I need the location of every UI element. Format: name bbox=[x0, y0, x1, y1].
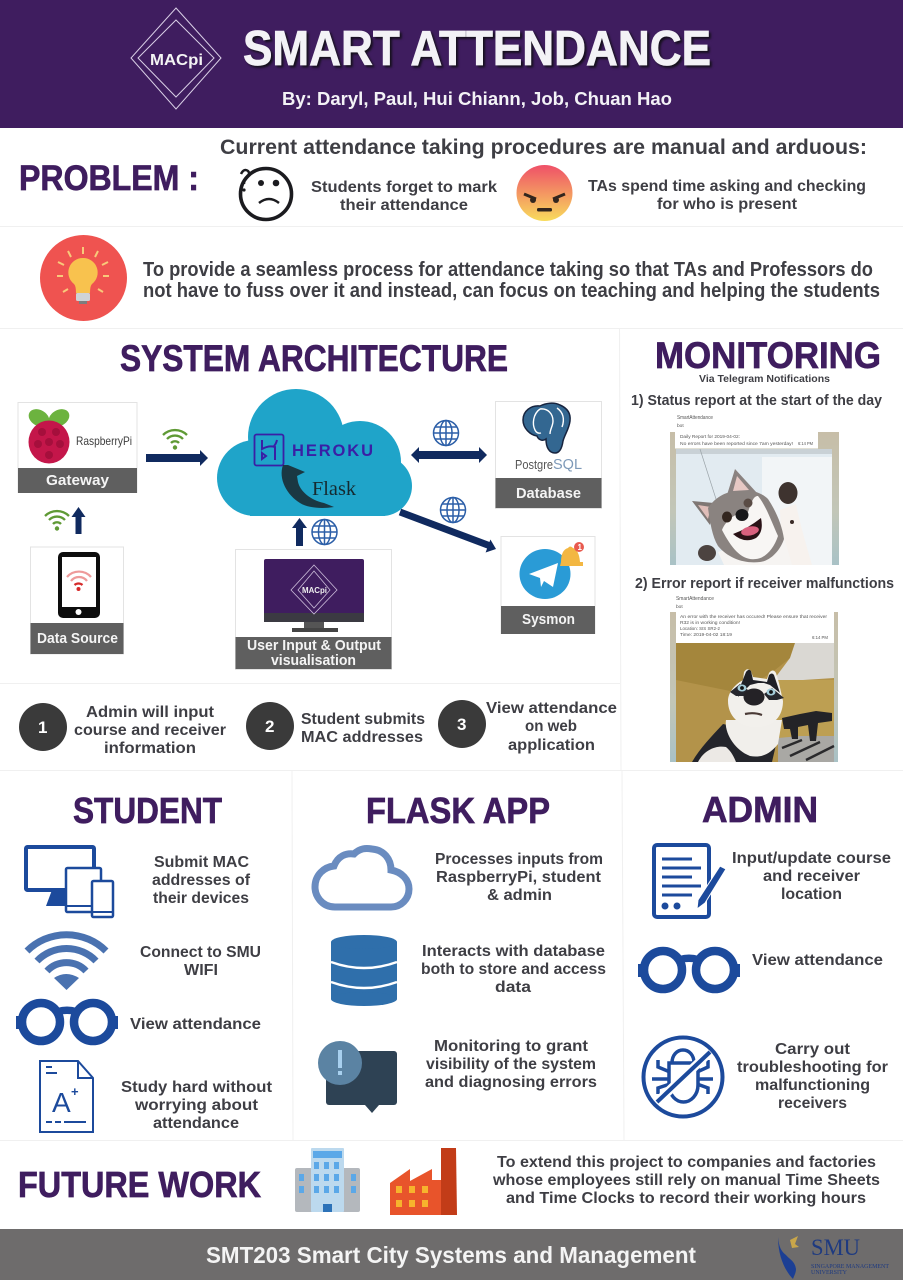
screenshot: status report with happy dog bbox=[670, 415, 839, 565]
monitoring text: Monitoring to grant bbox=[434, 1038, 589, 1055]
future work text: whose employees still rely on manual Time Sheets bbox=[492, 1172, 880, 1189]
paws bbox=[778, 482, 798, 504]
student forget text: Students forget to mark bbox=[311, 179, 497, 196]
wifi text: Connect to SMU bbox=[140, 944, 261, 961]
icon: monitor bbox=[264, 559, 364, 632]
screenshot: status report with happy dog: Daily Report for 2019-04-02: bbox=[680, 434, 740, 440]
processes text: & admin bbox=[487, 887, 552, 904]
data source box bbox=[30, 547, 124, 654]
troubleshooting text: Carry out bbox=[775, 1041, 851, 1058]
step 2: Student submits bbox=[301, 711, 425, 728]
icon: monitor: MACpi bbox=[302, 585, 327, 595]
arrow: gateway to cloud bbox=[146, 430, 208, 466]
step 1: 1 bbox=[38, 718, 47, 737]
interacts text: both to store and access bbox=[421, 961, 606, 978]
icon: office building bbox=[295, 1148, 360, 1212]
step 2: MAC addresses bbox=[301, 729, 423, 746]
screenshot: error report with surprised dog bbox=[670, 596, 838, 762]
processes text: Processes inputs from bbox=[435, 851, 603, 868]
problem heading: PROBLEM : bbox=[19, 159, 199, 198]
screenshot: error report with surprised dog: Time: 2019-04-02 18:19 bbox=[680, 632, 732, 638]
icon: confused face bbox=[240, 168, 292, 220]
step 1 bbox=[19, 703, 226, 757]
view attendance text: View attendance bbox=[130, 1016, 261, 1033]
ears bbox=[692, 501, 714, 525]
student heading: STUDENT bbox=[73, 790, 222, 831]
arrow: data source to gateway bbox=[45, 507, 86, 534]
arrow: cloud to sysmon bbox=[400, 498, 496, 552]
troubleshooting text bbox=[737, 1041, 888, 1112]
icon: alert message bbox=[318, 1041, 397, 1113]
arrow: cloud to database bbox=[411, 420, 487, 463]
interacts text: data bbox=[495, 979, 531, 996]
illustration: husky bbox=[692, 669, 834, 762]
icon: light bulb bbox=[40, 235, 127, 321]
status report label: 1) Status report at the start of the day bbox=[631, 392, 883, 409]
study text: attendance bbox=[153, 1115, 239, 1132]
troubleshooting text: malfunctioning bbox=[755, 1077, 870, 1094]
head bbox=[708, 490, 784, 562]
monitoring text bbox=[425, 1038, 597, 1091]
study text: worrying about bbox=[134, 1097, 259, 1114]
arrow: user input to cloud bbox=[292, 518, 337, 546]
screenshot: status report with happy dog: bot bbox=[677, 423, 684, 429]
screenshot: error report with surprised dog: Location: SIS SR2-2 bbox=[680, 626, 720, 632]
gateway box: RaspberryPi bbox=[76, 434, 132, 448]
footer bbox=[0, 1229, 903, 1280]
panel: process steps bbox=[19, 700, 617, 757]
icon: outline cloud bbox=[315, 849, 409, 907]
TA time text bbox=[588, 178, 866, 213]
step 2: 2 bbox=[265, 717, 274, 736]
icon: document and pen bbox=[654, 845, 726, 917]
icon: graded paper bbox=[40, 1061, 93, 1132]
objective text bbox=[143, 259, 880, 302]
submit text bbox=[152, 854, 251, 907]
step 3: View attendance bbox=[486, 700, 617, 717]
icon: raspberry bbox=[25, 406, 73, 464]
future work text bbox=[492, 1154, 880, 1207]
logo: SMU bbox=[778, 1235, 889, 1279]
icon: wifi bbox=[27, 935, 106, 990]
authors: By: Daryl, Paul, Hui Chiann, Job, Chuan Hao bbox=[282, 89, 672, 109]
gateway box: Gateway bbox=[46, 472, 110, 489]
illustration: dog bbox=[692, 469, 812, 565]
panel: future work bbox=[18, 1148, 880, 1215]
panel: student bbox=[16, 790, 273, 1132]
screenshot: status report with happy dog: 6:14 PM bbox=[798, 441, 813, 447]
section heading: SYSTEM ARCHITECTURE bbox=[120, 338, 508, 379]
screenshot: error report with surprised dog: R32 is in working condition! bbox=[680, 620, 740, 626]
blanket and toy bbox=[778, 736, 834, 762]
PostgreSQL wordmark bbox=[515, 456, 582, 473]
sysmon box: Sysmon bbox=[522, 611, 575, 628]
monitoring text: and diagnosing errors bbox=[425, 1074, 597, 1091]
user input and output box: visualisation bbox=[271, 652, 356, 669]
panel: monitoring bbox=[631, 335, 894, 762]
database box: Database bbox=[516, 485, 581, 502]
panel: admin bbox=[638, 789, 891, 1116]
admin heading: ADMIN bbox=[702, 789, 818, 830]
step 1: information bbox=[104, 740, 196, 757]
dark fur and collar bbox=[692, 724, 778, 762]
logo: Flask bbox=[282, 465, 356, 508]
troubleshooting text: receivers bbox=[778, 1095, 847, 1112]
gateway box bbox=[18, 402, 137, 493]
sysmon box bbox=[501, 536, 595, 634]
processes text bbox=[435, 851, 603, 904]
input text: and receiver bbox=[763, 868, 860, 885]
step 3 bbox=[438, 700, 617, 754]
data source box: Data Source bbox=[37, 630, 118, 647]
icon: graded paper: + bbox=[71, 1084, 79, 1099]
logo: Heroku bbox=[254, 434, 373, 466]
wifi text bbox=[140, 944, 261, 979]
user input and output box bbox=[236, 550, 392, 670]
troubleshooting text: troubleshooting for bbox=[737, 1059, 888, 1076]
step 1: Admin will input bbox=[86, 704, 215, 721]
step 3: 3 bbox=[457, 715, 466, 734]
interacts text: Interacts with database bbox=[422, 943, 605, 960]
icon: glasses bbox=[638, 951, 740, 989]
icon: glasses bbox=[16, 1003, 118, 1041]
future work text: and Time Clocks to record their working hours bbox=[506, 1190, 866, 1207]
logo: SMU: SINGAPORE MANAGEMENT bbox=[811, 1264, 889, 1270]
step 1: course and receiver bbox=[74, 722, 226, 739]
submit text: their devices bbox=[153, 890, 249, 907]
screenshot: error report with surprised dog: SmartAttendance bbox=[676, 596, 714, 602]
student forget text: their attendance bbox=[340, 197, 468, 214]
white chest bbox=[726, 720, 782, 756]
panel: system architecture bbox=[18, 338, 602, 670]
database box bbox=[496, 402, 602, 508]
screenshot: error report with surprised dog: bot bbox=[676, 604, 683, 610]
header banner bbox=[0, 0, 903, 128]
study text: Study hard without bbox=[121, 1079, 273, 1096]
panel: flask app bbox=[315, 790, 606, 1113]
user input and output box: User Input & Output bbox=[247, 637, 381, 654]
icon: factory bbox=[390, 1148, 457, 1215]
icon: PostgreSQL elephant bbox=[523, 403, 570, 453]
head bbox=[728, 669, 783, 727]
raised arm bbox=[780, 504, 812, 565]
view attendance text: View attendance bbox=[752, 952, 883, 969]
screenshot: error report with surprised dog: 6:14 PM bbox=[812, 635, 828, 641]
icon: phone bbox=[58, 552, 100, 618]
processes text: RaspberryPi, student bbox=[436, 869, 602, 886]
wifi text: WIFI bbox=[184, 962, 218, 979]
icon: devices bbox=[26, 847, 113, 917]
flask heading: FLASK APP bbox=[366, 790, 550, 831]
cloud: Heroku and Flask bbox=[217, 389, 412, 516]
step 3: application bbox=[508, 737, 595, 754]
logo: SMU: SMU bbox=[811, 1235, 860, 1260]
TA time text: for who is present bbox=[657, 196, 798, 213]
submit text: Submit MAC bbox=[154, 854, 249, 871]
logo: SMU: UNIVERSITY bbox=[811, 1270, 848, 1276]
screenshot: status report with happy dog: No errors have been reported since 7am yesterday! bbox=[680, 441, 793, 447]
logo: MACpi diamond bbox=[131, 8, 221, 109]
input text: location bbox=[781, 886, 842, 903]
icon: Telegram: 1 bbox=[578, 543, 582, 552]
icon: database bbox=[331, 935, 397, 1006]
study text bbox=[121, 1079, 273, 1132]
body bbox=[718, 530, 792, 565]
monitoring text: visibility of the system bbox=[426, 1056, 596, 1073]
screenshot: error report with surprised dog: An error with the receiver has occured! Please ensure that receiver bbox=[680, 614, 827, 620]
student forget text bbox=[311, 179, 497, 214]
logo: MACpi diamond: MACpi bbox=[150, 52, 203, 69]
PostgreSQL wordmark: SQL bbox=[553, 456, 582, 473]
screenshot: status report with happy dog: SmartAttendance bbox=[677, 415, 713, 421]
icon: graded paper: A bbox=[52, 1087, 71, 1118]
interacts text bbox=[421, 943, 606, 996]
icon: no bugs bbox=[644, 1038, 722, 1116]
logo: Heroku: HEROKU bbox=[292, 442, 373, 460]
error report label: 2) Error report if receiver malfunctions bbox=[635, 575, 894, 592]
monitoring heading: MONITORING bbox=[655, 335, 881, 376]
step 3: on web bbox=[525, 718, 577, 735]
input text: Input/update course bbox=[732, 850, 891, 867]
title: SMART ATTENDANCE bbox=[243, 22, 711, 76]
problem summary: Current attendance taking procedures are manual and arduous: bbox=[220, 136, 867, 159]
PostgreSQL wordmark: Postgre bbox=[515, 457, 553, 472]
submit text: addresses of bbox=[152, 872, 251, 889]
TA time text: TAs spend time asking and checking bbox=[588, 178, 866, 195]
input text bbox=[732, 850, 891, 903]
step 2 bbox=[246, 702, 425, 750]
icon: angry face bbox=[516, 165, 572, 221]
course name: SMT203 Smart City Systems and Management bbox=[206, 1242, 696, 1268]
future work text: To extend this project to companies and factories bbox=[497, 1154, 876, 1171]
monitoring subtitle: Via Telegram Notifications bbox=[699, 373, 830, 385]
future work heading: FUTURE WORK bbox=[18, 1164, 261, 1205]
logo: Flask: Flask bbox=[312, 478, 356, 500]
panel: problem bbox=[19, 136, 867, 221]
panel: objective bbox=[40, 235, 880, 321]
